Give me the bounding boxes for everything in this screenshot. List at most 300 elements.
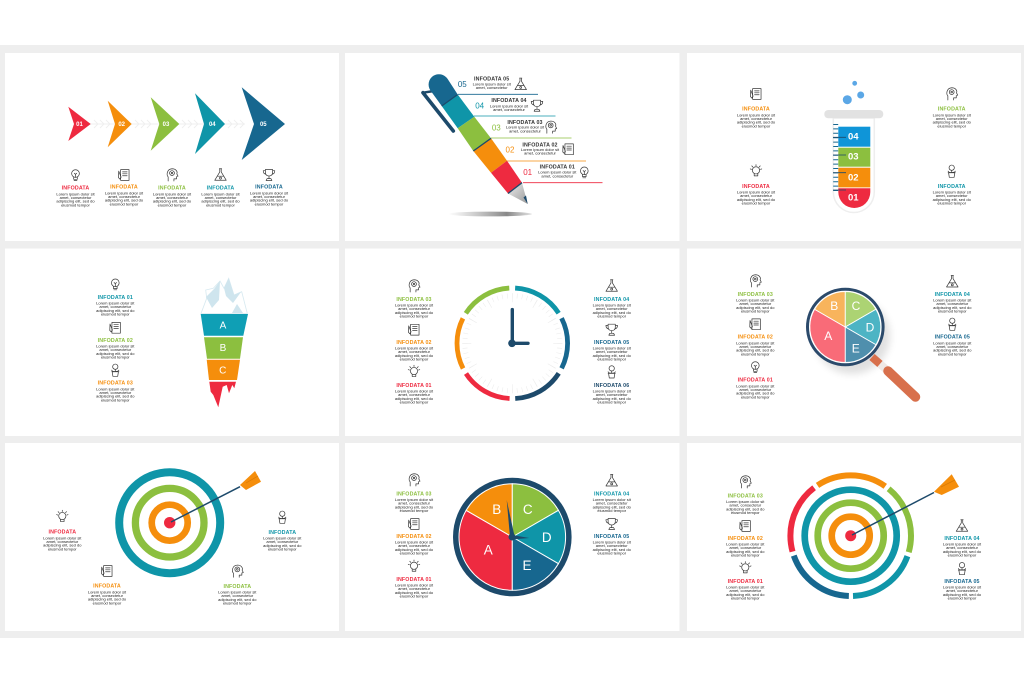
text block 04: eiusmod tempor xyxy=(938,309,967,314)
text block top right: INFODATA xyxy=(938,107,966,113)
step 05: amet, consectetur xyxy=(476,85,508,90)
clock ticks xyxy=(465,296,560,391)
text block 02 xyxy=(395,519,434,556)
text block 05: adipiscing elit, sed do xyxy=(943,592,982,597)
text block 03: eiusmod tempor xyxy=(731,510,760,515)
arrow 03 xyxy=(151,97,179,151)
text block red: amet, consectetur xyxy=(46,539,79,544)
text block 02 xyxy=(726,521,765,558)
text block orange: Lorem ipsum dolor sit xyxy=(88,589,127,594)
text block 01: adipiscing elit, sed do xyxy=(96,308,135,313)
text block 01: INFODATA xyxy=(62,186,89,192)
text block 01: adipiscing elit, sed do xyxy=(726,592,765,597)
step 04: INFODATA 04 xyxy=(491,98,527,104)
text block 03: amet, consectetur xyxy=(398,501,431,506)
text block 05: Lorem ipsum dolor sit xyxy=(593,540,632,545)
panel: pen xyxy=(345,53,680,241)
text block 01: INFODATA 01 xyxy=(396,577,432,583)
text block 03: INFODATA 03 xyxy=(728,493,763,499)
text block 05: amet, consectetur xyxy=(596,543,628,548)
text block 03: amet, consectetur xyxy=(739,301,772,306)
pie clock illustration: E xyxy=(522,558,532,573)
text block 03: INFODATA 03 xyxy=(98,381,133,387)
step 01 xyxy=(523,165,588,178)
step 02 xyxy=(506,142,573,156)
text block 04: adipiscing elit, sed do xyxy=(201,199,240,204)
text block 04: INFODATA xyxy=(207,186,234,192)
text block 05: Lorem ipsum dolor sit xyxy=(943,585,982,590)
text block green: adipiscing elit, sed do xyxy=(218,597,257,602)
text block 03: Lorem ipsum dolor sit xyxy=(395,303,434,308)
text block 02: amet, consectetur xyxy=(108,194,141,199)
text block 04: INFODATA 04 xyxy=(594,297,629,303)
text block 01: amet, consectetur xyxy=(60,195,92,200)
step 05: 05 xyxy=(458,80,467,89)
text block 04: adipiscing elit, sed do xyxy=(943,549,982,554)
text block red: adipiscing elit, sed do xyxy=(43,543,82,548)
text block 02: adipiscing elit, sed do xyxy=(395,353,434,358)
pie clock illustration: B xyxy=(492,502,501,517)
magnifier illustration xyxy=(808,289,916,397)
text block 03: adipiscing elit, sed do xyxy=(96,394,135,399)
text block 05: amet, consectetur xyxy=(936,344,969,349)
text block 06: amet, consectetur xyxy=(596,392,628,397)
text block bottom left: adipiscing elit, sed do xyxy=(737,197,776,202)
chevron connectors xyxy=(90,120,245,128)
iceberg illustration: A xyxy=(220,321,227,332)
text block 03: adipiscing elit, sed do xyxy=(736,305,775,310)
text block 01 xyxy=(96,279,135,317)
text block bottom left: Lorem ipsum dolor sit xyxy=(737,190,776,195)
panel: test tube xyxy=(687,53,1021,241)
text block 02: amet, consectetur xyxy=(99,347,132,352)
text block bottom right xyxy=(933,165,972,206)
text block 04: eiusmod tempor xyxy=(206,202,236,207)
text block 03: amet, consectetur xyxy=(729,503,762,508)
step 01: amet, consectetur xyxy=(541,173,574,178)
text block 03: eiusmod tempor xyxy=(101,397,130,402)
text block top left xyxy=(737,89,776,128)
arrow 03: 03 xyxy=(163,122,170,128)
text block 02: Lorem ipsum dolor sit xyxy=(395,540,434,545)
text block orange: INFODATA xyxy=(93,584,121,590)
text block 05 xyxy=(250,169,289,206)
step 05: INFODATA 05 xyxy=(474,77,509,83)
text block top left: eiusmod tempor xyxy=(742,123,771,128)
text block 05 xyxy=(943,562,982,601)
text block 05: amet, consectetur xyxy=(946,588,979,593)
text block 01: eiusmod tempor xyxy=(101,312,130,317)
text block 04: INFODATA 04 xyxy=(935,292,970,298)
text block teal: adipiscing elit, sed do xyxy=(263,543,302,548)
text block 01: Lorem ipsum dolor sit xyxy=(395,583,434,588)
arrow 04 xyxy=(195,93,225,154)
text block 01: eiusmod tempor xyxy=(400,400,429,405)
text block 03: eiusmod tempor xyxy=(400,314,429,319)
panel: magnifier xyxy=(687,248,1021,436)
text block 04: INFODATA 04 xyxy=(944,536,980,542)
bubbles xyxy=(843,81,864,104)
text block 04 xyxy=(943,520,982,558)
text block 01: Lorem ipsum dolor sit xyxy=(395,389,434,394)
text block 02: amet, consectetur xyxy=(739,344,772,349)
text block 05: adipiscing elit, sed do xyxy=(933,348,972,353)
text block top right: adipiscing elit, sed do xyxy=(933,120,972,125)
text block 02: INFODATA 02 xyxy=(728,536,763,542)
text block 05: eiusmod tempor xyxy=(255,201,284,206)
text block 02: Lorem ipsum dolor sit xyxy=(726,542,765,547)
text block 01: adipiscing elit, sed do xyxy=(736,391,775,396)
text block 02: Lorem ipsum dolor sit xyxy=(736,340,775,345)
text block bottom left: amet, consectetur xyxy=(740,193,773,198)
text block green: eiusmod tempor xyxy=(223,601,252,606)
step 04: 04 xyxy=(475,101,485,110)
text block green: amet, consectetur xyxy=(221,593,254,598)
text block red xyxy=(43,510,82,551)
text block red: INFODATA xyxy=(48,530,76,536)
text block 01: INFODATA 01 xyxy=(396,383,432,389)
text block 03 xyxy=(395,280,434,319)
panel: target xyxy=(5,443,339,631)
text block 03: Lorem ipsum dolor sit xyxy=(395,497,434,502)
text block 03: amet, consectetur xyxy=(156,195,189,200)
text block red: Lorem ipsum dolor sit xyxy=(43,535,82,540)
text block 02: adipiscing elit, sed do xyxy=(736,348,775,353)
text block 03 xyxy=(395,474,434,513)
text block 04: Lorem ipsum dolor sit xyxy=(943,542,982,547)
text block 02: Lorem ipsum dolor sit xyxy=(395,346,434,351)
tube illustration: 02 xyxy=(848,172,859,183)
text block 05: amet, consectetur xyxy=(253,194,286,199)
inner target rings xyxy=(805,490,897,582)
magnifier illustration: D xyxy=(866,321,875,335)
text block red: eiusmod tempor xyxy=(48,546,77,551)
text block 03: adipiscing elit, sed do xyxy=(395,504,434,509)
step 05: Lorem ipsum dolor sit xyxy=(473,81,512,86)
text block 04: amet, consectetur xyxy=(596,501,628,506)
text block 05: Lorem ipsum dolor sit xyxy=(593,346,632,351)
text block 04: amet, consectetur xyxy=(596,306,628,311)
text block bottom left xyxy=(737,165,776,206)
text block 04: amet, consectetur xyxy=(205,195,237,200)
text block 02: amet, consectetur xyxy=(398,543,431,548)
text block 02: INFODATA 02 xyxy=(98,338,133,344)
text block 01 xyxy=(395,560,434,599)
text block bottom right: INFODATA xyxy=(938,184,966,190)
text block 04: eiusmod tempor xyxy=(948,553,977,558)
text block 04: adipiscing elit, sed do xyxy=(593,504,632,509)
text block top left: INFODATA xyxy=(742,107,770,113)
text block 01: Lorem ipsum dolor sit xyxy=(96,301,135,306)
text block 06: eiusmod tempor xyxy=(597,400,627,405)
text block 05: adipiscing elit, sed do xyxy=(250,198,289,203)
text block 05 xyxy=(593,518,632,556)
text block 02: INFODATA 02 xyxy=(396,340,432,346)
text block 04 xyxy=(201,169,240,207)
text block 05: INFODATA 05 xyxy=(944,579,980,585)
text block 02: eiusmod tempor xyxy=(400,551,429,556)
outer ring segments xyxy=(790,475,911,596)
step 04 xyxy=(475,98,543,112)
text block 02: Lorem ipsum dolor sit xyxy=(96,344,135,349)
text block 04 xyxy=(933,275,972,314)
text block 01: amet, consectetur xyxy=(398,392,431,397)
arrow 02: 02 xyxy=(118,122,126,128)
text block top right: amet, consectetur xyxy=(936,116,968,121)
arrow xyxy=(171,471,261,522)
pie clock illustration: D xyxy=(542,530,552,545)
text block 04 xyxy=(593,474,632,513)
text block 02: INFODATA 02 xyxy=(396,534,432,540)
text block 01: adipiscing elit, sed do xyxy=(395,396,434,401)
text block 03: Lorem ipsum dolor sit xyxy=(726,499,765,504)
step 02: INFODATA 02 xyxy=(522,142,558,148)
text block 02 xyxy=(96,322,135,360)
text block 04: eiusmod tempor xyxy=(597,508,627,513)
text block 05: INFODATA 05 xyxy=(935,335,970,341)
step 04: Lorem ipsum dolor sit xyxy=(490,103,529,108)
text block 01: eiusmod tempor xyxy=(400,594,429,599)
text block 05: INFODATA 05 xyxy=(594,534,629,540)
text block 05: adipiscing elit, sed do xyxy=(593,353,632,358)
text block 04: adipiscing elit, sed do xyxy=(933,305,972,310)
text block 01: eiusmod tempor xyxy=(731,596,760,601)
target rings xyxy=(119,472,220,573)
text block 05: INFODATA 05 xyxy=(594,340,629,346)
text block teal: Lorem ipsum dolor sit xyxy=(263,536,302,541)
text block 03 xyxy=(96,364,135,402)
magnifier illustration: A xyxy=(824,329,832,343)
text block 01 xyxy=(736,362,775,399)
text block 02: INFODATA 02 xyxy=(738,335,773,341)
text block 02: eiusmod tempor xyxy=(110,201,139,206)
text block 03: INFODATA xyxy=(158,186,186,192)
arrow 05: 05 xyxy=(260,122,267,128)
arrow xyxy=(852,474,959,535)
pie clock illustration: A xyxy=(484,542,493,557)
arrow 02 xyxy=(108,101,132,147)
text block 03: INFODATA 03 xyxy=(396,491,432,497)
text block 01: INFODATA 01 xyxy=(98,295,133,301)
text block bottom right: adipiscing elit, sed do xyxy=(933,197,972,202)
arrow 05 xyxy=(242,87,285,160)
text block 05: eiusmod tempor xyxy=(938,351,967,356)
text block orange: adipiscing elit, sed do xyxy=(88,597,127,602)
tube illustration xyxy=(824,110,883,212)
pen illustration xyxy=(423,74,528,204)
text block 05: adipiscing elit, sed do xyxy=(593,547,632,552)
arrow 04: 04 xyxy=(209,122,216,128)
text block 05: Lorem ipsum dolor sit xyxy=(933,340,972,345)
text block green: INFODATA xyxy=(223,584,251,590)
text block 03: INFODATA 03 xyxy=(396,297,432,303)
iceberg illustration: B xyxy=(220,343,227,354)
text block 03 xyxy=(153,169,192,207)
text block 04: Lorem ipsum dolor sit xyxy=(593,303,632,308)
text block 01: Lorem ipsum dolor sit xyxy=(56,191,96,196)
text block 01 xyxy=(56,170,96,207)
text block 02: eiusmod tempor xyxy=(731,553,760,558)
step 02: Lorem ipsum dolor sit xyxy=(521,147,560,152)
text block bottom left: eiusmod tempor xyxy=(742,201,771,206)
text block 05: Lorem ipsum dolor sit xyxy=(250,190,289,195)
text block 03: Lorem ipsum dolor sit xyxy=(96,386,135,391)
step 05 xyxy=(458,77,526,90)
text block 03: eiusmod tempor xyxy=(741,309,770,314)
text block 05 xyxy=(593,324,632,362)
text block 01: adipiscing elit, sed do xyxy=(56,199,95,204)
text block top left: adipiscing elit, sed do xyxy=(737,120,776,125)
step 03: amet, consectetur xyxy=(509,128,542,133)
text block teal xyxy=(263,511,302,552)
text block 02: eiusmod tempor xyxy=(101,355,130,360)
iceberg illustration: C xyxy=(219,365,226,376)
text block 03: amet, consectetur xyxy=(398,306,431,311)
text block bottom right: eiusmod tempor xyxy=(937,201,967,206)
text block 01: adipiscing elit, sed do xyxy=(395,590,434,595)
text block 02 xyxy=(395,324,434,362)
text block 03: eiusmod tempor xyxy=(158,202,187,207)
step 01: INFODATA 01 xyxy=(540,165,575,171)
text block bottom right: amet, consectetur xyxy=(936,193,968,198)
text block 04: Lorem ipsum dolor sit xyxy=(201,191,240,196)
tube illustration: 03 xyxy=(848,152,859,163)
step 02: amet, consectetur xyxy=(524,151,557,156)
text block green: Lorem ipsum dolor sit xyxy=(218,590,257,595)
step 01: 01 xyxy=(523,168,533,177)
text block 05 xyxy=(933,318,972,356)
panel: iceberg xyxy=(5,248,339,436)
text block teal: INFODATA xyxy=(268,530,296,536)
text block 05: eiusmod tempor xyxy=(597,551,627,556)
text block 05: eiusmod tempor xyxy=(948,596,977,601)
text block 04 xyxy=(593,280,632,319)
text block 01: amet, consectetur xyxy=(729,588,762,593)
text block 01 xyxy=(726,562,765,601)
magnifier illustration: B xyxy=(830,299,838,313)
text block 03: eiusmod tempor xyxy=(400,508,429,513)
text block green xyxy=(218,565,257,606)
text block 01: amet, consectetur xyxy=(739,387,772,392)
pen shadow xyxy=(448,212,532,216)
step 03 xyxy=(492,120,557,133)
text block 03: amet, consectetur xyxy=(99,390,132,395)
text block 02: amet, consectetur xyxy=(729,545,762,550)
panel: arrows timeline xyxy=(5,53,339,241)
text block 05: INFODATA xyxy=(255,185,283,191)
magnifier illustration: C xyxy=(852,299,861,313)
text block teal: amet, consectetur xyxy=(266,539,299,544)
tube illustration: 04 xyxy=(848,131,859,142)
text block 05: amet, consectetur xyxy=(596,349,628,354)
text block top right xyxy=(933,88,972,128)
text block top right: Lorem ipsum dolor sit xyxy=(933,112,972,117)
text block 02: Lorem ipsum dolor sit xyxy=(105,190,144,195)
text block 04: Lorem ipsum dolor sit xyxy=(593,497,632,502)
text block bottom right: Lorem ipsum dolor sit xyxy=(933,190,972,195)
text block 02: eiusmod tempor xyxy=(400,357,429,362)
tube illustration: 01 xyxy=(848,193,859,204)
text block 03: Lorem ipsum dolor sit xyxy=(736,298,775,303)
clock ring segments xyxy=(457,288,568,399)
text block 01: INFODATA 01 xyxy=(738,378,773,384)
text block 01: amet, consectetur xyxy=(99,304,132,309)
text block orange: amet, consectetur xyxy=(91,593,124,598)
text block 04: amet, consectetur xyxy=(936,301,969,306)
text block 03: adipiscing elit, sed do xyxy=(726,506,765,511)
text block 03: adipiscing elit, sed do xyxy=(153,199,192,204)
text block 02: amet, consectetur xyxy=(398,349,431,354)
text block top left: Lorem ipsum dolor sit xyxy=(737,112,776,117)
step 03: Lorem ipsum dolor sit xyxy=(506,125,545,130)
text block top left: amet, consectetur xyxy=(740,116,773,121)
text block 03: Lorem ipsum dolor sit xyxy=(153,191,192,196)
text block 02: adipiscing elit, sed do xyxy=(96,351,135,356)
arrow 01: 01 xyxy=(76,122,83,128)
text block 06: adipiscing elit, sed do xyxy=(593,396,632,401)
text block 02 xyxy=(105,170,144,206)
text block 03: adipiscing elit, sed do xyxy=(395,310,434,315)
text block 06 xyxy=(593,366,632,405)
text block 05: eiusmod tempor xyxy=(597,357,627,362)
text block 01: Lorem ipsum dolor sit xyxy=(726,585,765,590)
text block 02 xyxy=(736,319,775,356)
clock hands xyxy=(508,310,528,347)
text block bottom left: INFODATA xyxy=(742,184,770,190)
text block 02: INFODATA xyxy=(110,185,138,191)
step 03: 03 xyxy=(492,123,501,132)
step 03: INFODATA 03 xyxy=(507,120,543,126)
text block 04: adipiscing elit, sed do xyxy=(593,310,632,315)
text block teal: eiusmod tempor xyxy=(268,547,297,552)
text block 02: adipiscing elit, sed do xyxy=(726,549,765,554)
text block 01: eiusmod tempor xyxy=(61,202,91,207)
text block 06: Lorem ipsum dolor sit xyxy=(593,389,632,394)
text block top right: eiusmod tempor xyxy=(937,123,967,128)
text block 01: amet, consectetur xyxy=(398,586,431,591)
magnifier illustration: E xyxy=(852,342,860,356)
text block 04: amet, consectetur xyxy=(946,545,979,550)
pie clock illustration xyxy=(453,478,572,596)
iceberg illustration xyxy=(201,278,248,407)
text block 03 xyxy=(726,476,765,515)
text block 03: INFODATA 03 xyxy=(738,292,773,298)
step 01: Lorem ipsum dolor sit xyxy=(538,170,577,175)
pen leader lines xyxy=(458,94,602,183)
pie clock illustration: C xyxy=(523,502,533,517)
text block 03 xyxy=(736,275,775,314)
text block 01: INFODATA 01 xyxy=(728,579,763,585)
text block 01: Lorem ipsum dolor sit xyxy=(736,383,775,388)
text block orange xyxy=(88,566,127,605)
panel: target with outer ring xyxy=(687,443,1021,631)
text block 02: adipiscing elit, sed do xyxy=(105,198,144,203)
text block 02: eiusmod tempor xyxy=(741,351,770,356)
text block 01 xyxy=(395,365,434,405)
panel: clock pie xyxy=(345,443,680,631)
step 02: 02 xyxy=(506,145,515,154)
text block 04: eiusmod tempor xyxy=(597,314,627,319)
text block 04: INFODATA 04 xyxy=(594,491,629,497)
text block 04: Lorem ipsum dolor sit xyxy=(933,298,972,303)
panel: clock xyxy=(345,248,680,436)
text block 06: INFODATA 06 xyxy=(594,383,629,389)
text block 02: adipiscing elit, sed do xyxy=(395,547,434,552)
text block 01: eiusmod tempor xyxy=(741,394,770,399)
arrow 01 xyxy=(68,107,91,141)
text block orange: eiusmod tempor xyxy=(93,600,122,605)
step 04: amet, consectetur xyxy=(493,107,526,112)
